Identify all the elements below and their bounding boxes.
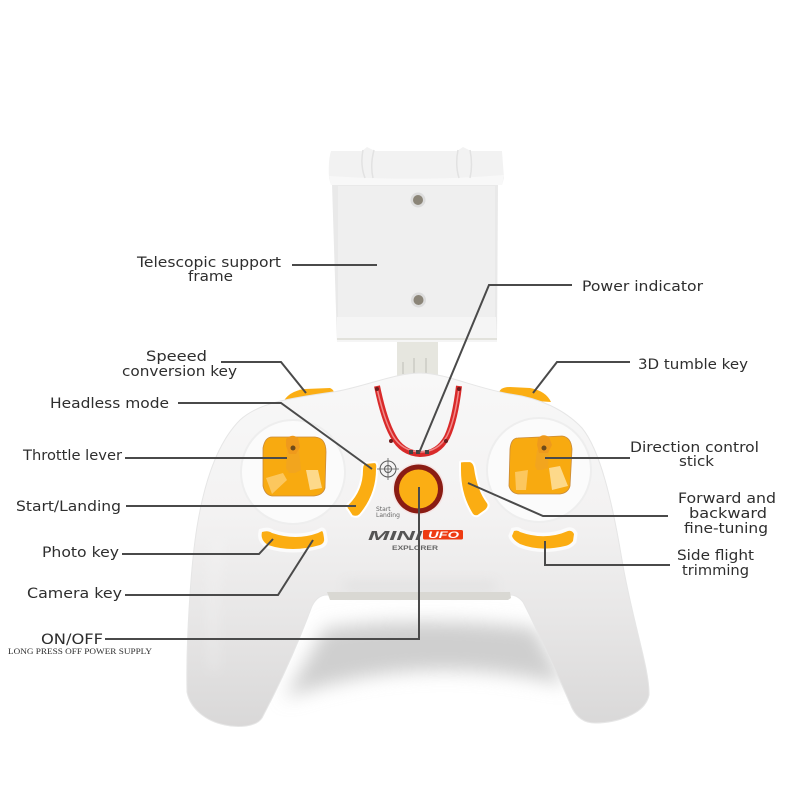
label: telescopic support frame: Telescopic support — [136, 255, 281, 271]
label: throttle lever: Throttle lever — [22, 448, 122, 464]
label: fine-tuning: fine-tuning — [684, 521, 768, 537]
label: long press off power supply: LONG PRESS OFF POWER SUPPLY — [8, 646, 152, 656]
label: start/landing: Start/Landing — [16, 499, 121, 515]
label: forward and: Forward and — [678, 491, 776, 507]
left stick well — [241, 420, 345, 524]
label: conversion key line 2: conversion key — [122, 364, 237, 380]
left grip highlight — [213, 540, 218, 670]
telescopic support frame — [329, 147, 504, 378]
fine-tuning key — [460, 461, 489, 516]
logo: UFO — [428, 530, 459, 540]
logo: EXPLORER — [392, 545, 438, 552]
label: speed conversion key: Speeed — [146, 349, 207, 365]
label: 3D tumble key: 3D tumble key — [638, 357, 748, 373]
label: on/off: ON/OFF — [41, 632, 103, 648]
label: backward: backward — [689, 506, 767, 522]
headless / start key — [346, 462, 377, 517]
photo and camera key — [262, 531, 324, 549]
right stick well — [487, 418, 591, 522]
label: frame line 2: frame — [188, 269, 233, 285]
shading above the bridge — [345, 582, 495, 590]
shoulder key: speed conversion — [282, 388, 334, 406]
logo — [368, 528, 463, 552]
right stick pad — [509, 435, 572, 494]
controller body — [187, 373, 649, 727]
shoulder key: 3D tumble — [499, 387, 551, 402]
label: headless mode: Headless mode — [50, 396, 169, 412]
label: trimming: trimming — [682, 563, 749, 579]
label: direction control stick: Direction control — [630, 440, 759, 456]
label: photo key: Photo key — [42, 545, 119, 561]
red power indicator U — [375, 386, 461, 454]
power button — [392, 463, 444, 515]
label: stick line 2: stick — [679, 454, 715, 470]
lower bridge — [327, 592, 511, 600]
leader lines — [105, 265, 670, 639]
start landing label: Landing — [376, 512, 400, 519]
label: camera key: Camera key — [27, 586, 122, 602]
left stick pad — [263, 436, 326, 496]
start landing label — [376, 506, 400, 519]
label: side flight: Side flight — [677, 548, 754, 564]
logo: MINI — [368, 528, 423, 543]
side flight trimming key — [512, 531, 574, 549]
start landing label: Start — [376, 506, 391, 513]
label: power indicator: Power indicator — [582, 279, 703, 295]
target symbol — [377, 458, 399, 480]
drop shadow under controller — [285, 622, 565, 698]
